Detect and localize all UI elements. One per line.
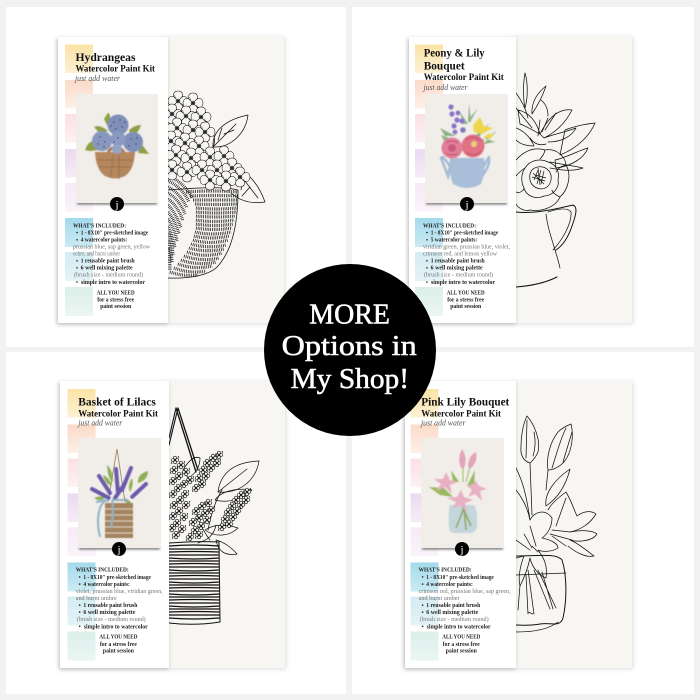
tagline: just add water [74,74,121,83]
what's included list: (brush size - medium round) [420,616,489,623]
what's included list: WHAT'S INCLUDED: [73,223,126,229]
what's included list: 6 well mixing palette [81,266,133,272]
title: Peony & Lily [424,46,485,60]
logo badge [460,197,474,211]
info card [405,381,516,668]
what's included list: 5 watercolor paints: [431,238,477,244]
what's included list: ALL YOU NEED [97,290,135,296]
title: Pink Lily Bouquet [421,395,509,409]
panel: Hydrangeas kit [58,36,284,323]
title: Basket of Lilacs [78,395,156,409]
what's included list [73,223,151,310]
logo badge: j [464,199,469,211]
what's included list: simple intro to watercolor [427,624,491,630]
painted print: lilacs in tin [78,438,161,548]
what's included list: prussian blue, sap green, yellow [73,244,151,250]
image shadow [79,547,160,550]
what's included list: for a stress free [443,642,480,648]
paper sheet [165,36,284,323]
tagline: just add water [423,83,468,92]
image shadow [426,202,507,205]
painted print: hydrangeas [76,94,158,203]
what's included list: 4 watercolor paints: [81,238,127,244]
callout: more options badge: My Shop! [291,363,409,395]
logo badge: j [114,199,119,211]
what's included list: 1 - 8X10" pre-sketched image [426,575,494,581]
what's included list: for a stress free [100,642,137,648]
what's included list: 1 reusable paint brush [83,603,138,609]
what's included list [423,223,511,310]
logo badge: j [459,544,464,556]
what's included list: 1 reusable paint brush [431,259,485,265]
callout: more options badge: MORE [309,298,390,330]
info card [58,37,168,323]
what's included list: 4 watercolor paints: [426,582,473,588]
panel: Basket of Lilacs kit [60,381,285,668]
what's included list: simple intro to watercolor [84,624,148,630]
paper sheet [513,36,632,323]
paper sheet [166,381,285,668]
what's included list: 1 - 8X10" pre-sketched image [81,230,149,236]
what's included list: ALL YOU NEED [99,635,137,641]
line art: lilies in jar [516,416,597,632]
what's included list: ALL YOU NEED [447,290,485,296]
image shadow [77,202,157,205]
what's included list: 6 well mixing palette [83,610,136,616]
callout: more options badge: Options in [282,330,417,362]
what's included list: 4 watercolor paints: [83,582,130,588]
logo badge [455,542,469,556]
what's included list: crimson red, and lemon yellow [423,252,498,258]
what's included list: for a stress free [447,298,485,304]
watercolor swatches [68,389,96,660]
subtitle: Watercolor Paint Kit [424,73,505,83]
what's included list: 6 well mixing palette [426,610,479,616]
what's included list: paint session [450,304,482,310]
image shadow [422,547,503,550]
what's included list: paint session [103,648,135,654]
watercolor swatches [65,44,93,316]
what's included list: WHAT'S INCLUDED: [76,568,129,574]
what's included list: and burnt umbre [76,596,117,602]
tagline: just add water [420,419,466,428]
what's included list: paint session [100,304,132,310]
painted print: peony and lily teapot [425,94,508,203]
line art: hydrangeas in basket [161,91,265,278]
what's included list: ochre, and burnt umber [73,252,120,258]
what's included list: for a stress free [97,298,135,304]
what's included list: crimson red, prussian blue, sap green, [419,589,511,595]
what's included list: and burnt umber [419,596,460,602]
watercolor swatches [410,389,438,660]
what's included list [419,568,511,654]
what's included list: viridian green, prussian blue, violet, [423,244,511,250]
what's included list: (brush size - medium round) [424,272,493,279]
title: Bouquet [424,58,465,72]
logo badge [110,197,124,211]
line art: lilacs in hanging tin [168,408,259,624]
what's included list: simple intro to watercolor [431,280,495,286]
what's included list [76,568,163,654]
what's included list: violet, prussian blue, viridian green, [76,589,163,595]
what's included list: 1 - 8X10" pre-sketched image [431,230,499,236]
title [424,46,485,72]
callout: more options badge [264,264,436,436]
what's included list: 6 well mixing palette [431,266,483,272]
what's included list: WHAT'S INCLUDED: [423,223,476,229]
title: Hydrangeas [76,50,136,64]
tagline: just add water [77,419,123,428]
panel: Pink Lily Bouquet kit [405,381,632,668]
info card [409,37,516,323]
subtitle: Watercolor Paint Kit [421,409,502,419]
panel: Peony & Lily Bouquet kit [409,36,632,323]
what's included list: 1 reusable paint brush [81,259,135,265]
logo badge [112,542,126,556]
what's included list: WHAT'S INCLUDED: [419,568,472,574]
logo badge: j [116,544,121,556]
watercolor swatches [415,44,443,316]
info card [60,381,169,668]
line art: peony and lily teapot [516,73,595,287]
what's included list: (brush size - medium round) [74,272,143,279]
painted print: lilies in jar [421,438,504,548]
paper sheet [513,381,632,668]
what's included list: simple intro to watercolor [81,280,145,286]
subtitle: Watercolor Paint Kit [76,65,156,75]
what's included list: ALL YOU NEED [442,635,480,641]
subtitle: Watercolor Paint Kit [78,409,159,419]
what's included list: paint session [446,648,478,654]
what's included list: 1 reusable paint brush [426,603,481,609]
what's included list: (brush size - medium round) [77,616,146,623]
what's included list: 1 - 8X10" pre-sketched image [83,575,151,581]
